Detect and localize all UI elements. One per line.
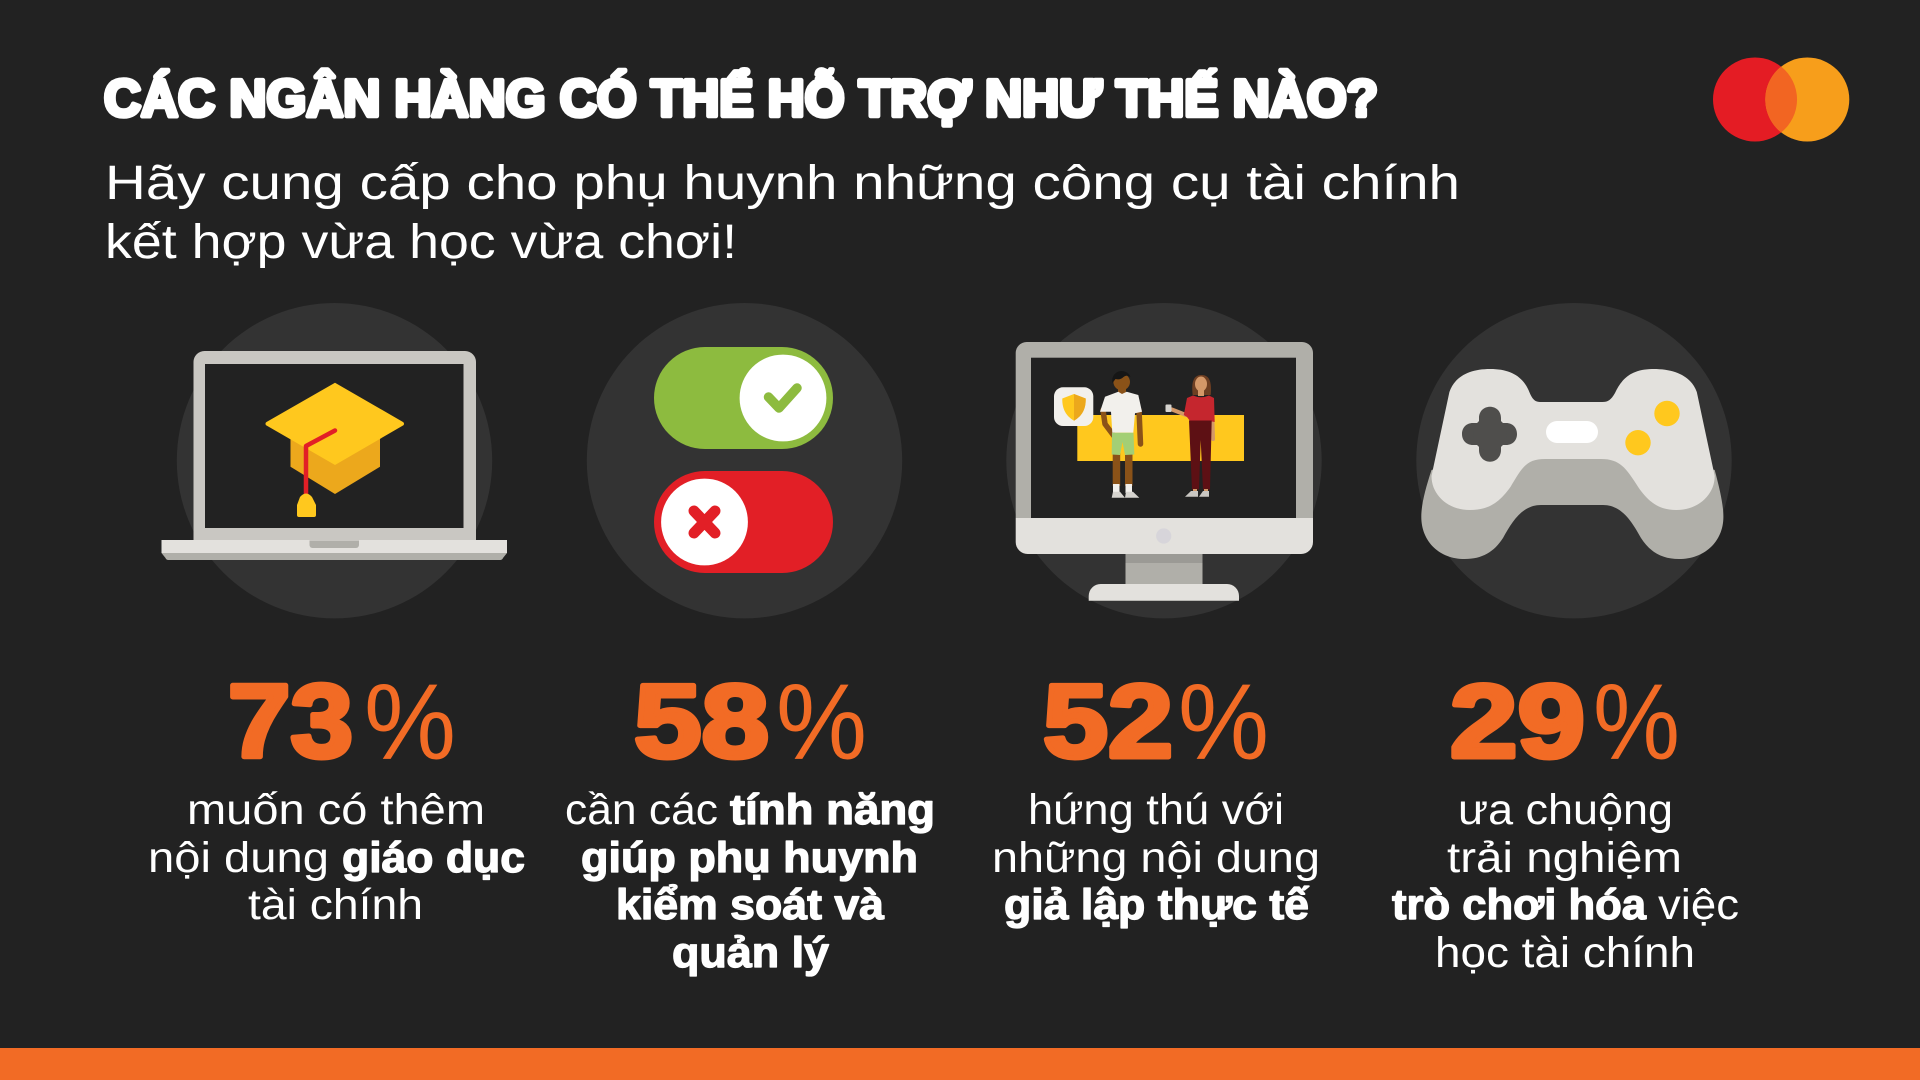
subtitle	[105, 157, 1460, 269]
description: 73%: tài chính	[248, 881, 423, 929]
statistic: 58%: %	[776, 661, 867, 782]
panel: parental controls	[565, 303, 935, 977]
statistic: 73%	[228, 661, 456, 782]
statistic: 52%: 52	[1043, 664, 1173, 780]
description: 58%: tính năng	[730, 786, 935, 834]
person: woman in red top	[1166, 375, 1215, 497]
description: 52%: giả lập thực tế	[1004, 881, 1309, 929]
description: 29%: trải nghiệm	[1447, 834, 1682, 882]
description: 58%	[565, 786, 935, 977]
description: 73%	[148, 786, 525, 929]
description: 29%	[1392, 786, 1739, 977]
description: 29%: học tài chính	[1435, 929, 1695, 977]
statistic: 73%: 73	[228, 664, 353, 780]
statistic: 52%	[1043, 661, 1269, 782]
logo: overlapping circles	[1713, 58, 1849, 142]
description: 58%: giúp phụ huynh	[581, 834, 918, 882]
description: 58%: quản lý	[672, 929, 829, 977]
icon: laptop with graduation cap	[162, 303, 507, 618]
panel: financial education	[148, 303, 525, 929]
description: 29%: trò chơi hóa	[1392, 881, 1647, 929]
description: 29%: việc	[1658, 881, 1739, 929]
statistic: 29%: %	[1593, 661, 1680, 782]
subtitle: kết hợp vừa học vừa chơi!	[105, 216, 737, 269]
statistic: 52%: %	[1178, 661, 1269, 782]
icon: desktop monitor with two people	[1006, 303, 1322, 618]
icon: on and off toggles	[587, 303, 902, 618]
description: 73%: muốn có thêm	[187, 786, 485, 834]
statistic: 29%: 29	[1450, 664, 1585, 780]
description: 73%: giáo dục	[342, 834, 525, 882]
statistic: 58%: 58	[634, 664, 769, 780]
panel: gamified learning	[1392, 303, 1739, 977]
description: 52%: hứng thú với	[1028, 786, 1284, 834]
panel: simulated content	[992, 303, 1322, 929]
title: CÁC NGÂN HÀNG CÓ THỂ HỖ TRỢ NHƯ THẾ NÀO?	[104, 69, 1378, 128]
statistic: 58%	[634, 661, 867, 782]
statistic: 29%	[1450, 661, 1680, 782]
subtitle: Hãy cung cấp cho phụ huynh những công cụ tài chính	[105, 157, 1460, 210]
statistic: 73%: %	[364, 661, 456, 782]
description: 52%: những nội dung	[992, 834, 1320, 882]
description: 73%: nội dung	[148, 834, 329, 882]
description: 58%: cần các	[565, 786, 718, 834]
description: 52%	[992, 786, 1320, 929]
description: 29%: ưa chuộng	[1458, 786, 1673, 834]
person: man in white shirt	[1100, 371, 1142, 498]
icon: game controller	[1416, 303, 1732, 618]
description: 58%: kiểm soát và	[616, 881, 885, 929]
footer bar	[0, 1048, 1920, 1080]
